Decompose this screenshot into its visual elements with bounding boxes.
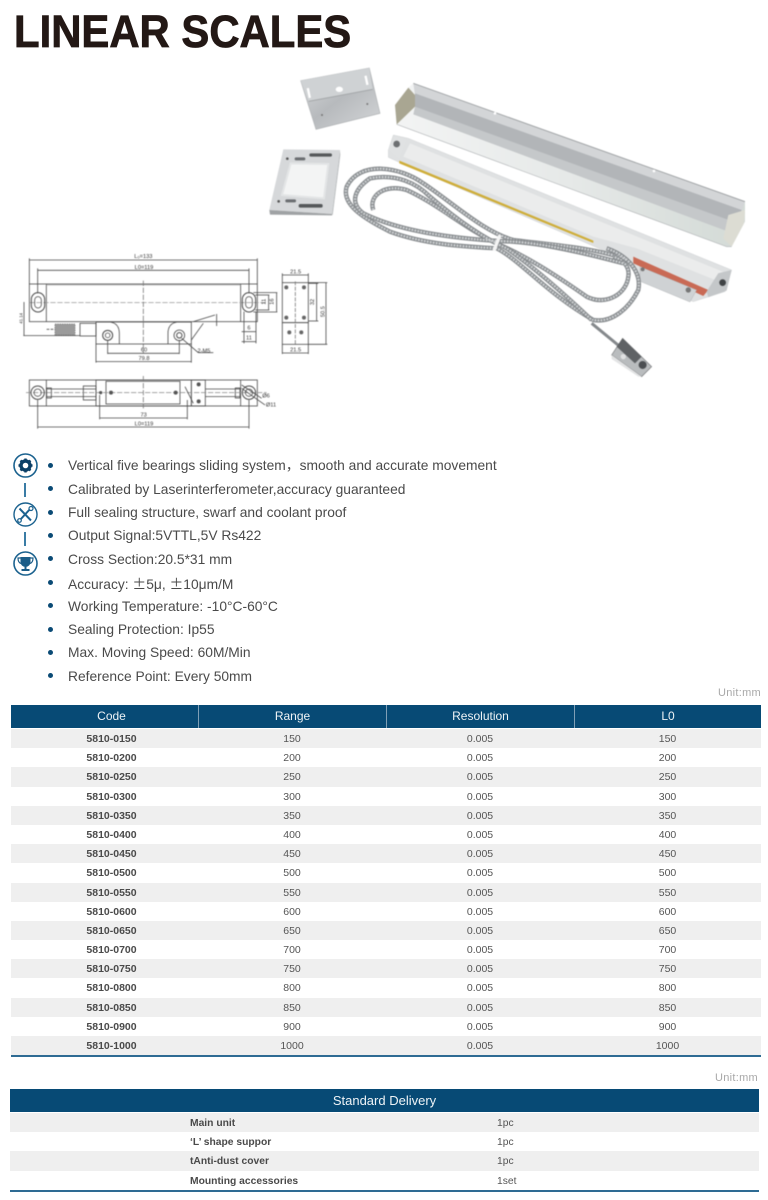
table rows: 300 xyxy=(659,791,676,803)
table rows: 0.005 xyxy=(467,752,493,764)
table rows: 0.005 xyxy=(467,1021,493,1033)
feature 3: Full sealing structure, swarf and coolant proof xyxy=(68,504,346,520)
bullet 10 xyxy=(48,673,53,678)
front view: L0=119 xyxy=(135,265,153,271)
table rows: 450 xyxy=(659,848,676,860)
table rows: 0.005 xyxy=(467,886,493,898)
table rows: 0.005 xyxy=(467,867,493,879)
connector line between lower icons xyxy=(24,532,26,546)
front view: 6 xyxy=(247,326,251,332)
armored cable xyxy=(346,169,639,347)
table rows: 0.005 xyxy=(467,1002,493,1014)
L-shaped bracket xyxy=(301,68,380,129)
bottom view xyxy=(26,376,276,429)
feature 7: Working Temperature: -10°C-60°C xyxy=(68,598,278,614)
table rows: 5810-0700 xyxy=(86,944,137,956)
table rows: 1000 xyxy=(280,1040,304,1052)
table rows xyxy=(11,729,761,1055)
table rows: 0.005 xyxy=(467,944,493,956)
table rows: 0.005 xyxy=(467,906,493,918)
table rows: 0.005 xyxy=(467,1040,493,1052)
bottom view: Ø11 xyxy=(266,403,276,409)
table rows: 900 xyxy=(283,1021,301,1033)
bullet 6 xyxy=(48,580,53,584)
bullet 2 xyxy=(48,486,53,491)
table rows: 1000 xyxy=(656,1040,679,1052)
bottom view: Ø6 xyxy=(262,393,270,399)
side view: 21.5 xyxy=(290,348,301,354)
product photo: linear scale with cover, brackets and cable xyxy=(268,67,746,378)
table rows: 5810-0600 xyxy=(86,906,137,918)
bottom view: L0=119 xyxy=(135,422,153,428)
table rows: 0.005 xyxy=(467,963,493,975)
table rows: 5810-0650 xyxy=(86,925,137,937)
bullet 1 xyxy=(48,462,53,468)
table rows: 5810-0750 xyxy=(86,963,137,975)
feature 5: Cross Section:20.5*31 mm xyxy=(68,552,232,566)
table rows: 5810-0200 xyxy=(86,752,137,764)
connector line between icons xyxy=(24,483,26,497)
table rows: 200 xyxy=(659,752,676,764)
table rows: 550 xyxy=(283,886,301,898)
table header: Range xyxy=(275,709,310,723)
bullet 5 xyxy=(48,556,53,561)
bullet 3 xyxy=(48,510,53,514)
delivery rows: 1pc xyxy=(497,1137,514,1148)
table header: L0 xyxy=(661,709,675,723)
feature 4: Output Signal:5VTTL,5V Rs422 xyxy=(68,528,261,543)
table rows: 0.005 xyxy=(467,925,493,937)
table rows: 300 xyxy=(283,791,301,803)
icon: gear badge xyxy=(13,453,38,478)
table rows: 0.005 xyxy=(467,982,493,994)
bullet 7 xyxy=(48,603,53,608)
delivery header: Standard Delivery xyxy=(333,1093,436,1108)
table rows: 150 xyxy=(283,733,301,745)
anti-dust cover xyxy=(395,83,745,247)
table rows: 400 xyxy=(283,829,301,841)
bullet 8 xyxy=(48,626,53,632)
table rows: 800 xyxy=(283,982,301,994)
side view: 32 xyxy=(310,299,316,305)
table rows: 150 xyxy=(659,733,676,745)
bottom view: 73 xyxy=(141,413,147,419)
table rows: 600 xyxy=(659,906,676,918)
table rows: 350 xyxy=(283,810,301,822)
front view: L₀=133 xyxy=(134,254,152,260)
front view: 60 xyxy=(141,348,147,354)
glass scale body xyxy=(388,135,732,302)
delivery rows: 1pc xyxy=(497,1156,514,1167)
table rows: 5810-0350 xyxy=(86,810,137,822)
table rows: 500 xyxy=(659,867,676,879)
table header xyxy=(11,705,761,728)
table rows: 700 xyxy=(283,944,301,956)
table rows: 5810-0900 xyxy=(86,1021,137,1033)
side view xyxy=(282,270,327,354)
table rows: 250 xyxy=(659,771,676,783)
bullet 9 xyxy=(48,650,53,655)
table rows: 5810-0500 xyxy=(86,867,137,879)
table rows: 650 xyxy=(659,925,676,937)
table rows: 850 xyxy=(659,1002,676,1014)
bullet 4 xyxy=(48,533,53,538)
front view: 16 xyxy=(270,299,276,305)
table rows: 750 xyxy=(659,963,676,975)
table rows: 200 xyxy=(283,752,301,764)
table rows: 900 xyxy=(659,1021,676,1033)
table rows: 250 xyxy=(283,771,301,783)
delivery rows: Mounting accessories xyxy=(190,1176,298,1187)
table rows: 5810-0850 xyxy=(86,1002,137,1014)
table rows: 600 xyxy=(283,906,301,918)
table rows: 0.005 xyxy=(467,771,493,783)
feature 9: Max. Moving Speed: 60M/Min xyxy=(68,645,251,660)
front view xyxy=(19,254,277,363)
mounting plate xyxy=(269,149,340,215)
delivery rows xyxy=(10,1113,759,1187)
feature 6: Accuracy: ±5μ, ±10μm/M xyxy=(68,572,233,592)
table header: Code xyxy=(97,709,126,723)
delivery rows: Main unit xyxy=(190,1118,235,1129)
technical dimension drawing xyxy=(19,253,328,430)
front view: 11 xyxy=(261,299,267,305)
table rows: 5810-0800 xyxy=(86,982,137,994)
delivery rows: 1set xyxy=(497,1176,516,1187)
feature 2: Calibrated by Laserinterferometer,accuracy guaranteed xyxy=(68,482,405,496)
table rows: 5810-0450 xyxy=(86,848,137,860)
table rows: 850 xyxy=(283,1002,301,1014)
table rows: 350 xyxy=(659,810,676,822)
specifications table xyxy=(11,705,761,1057)
feature 10: Reference Point: Every 50mm xyxy=(68,668,252,684)
table rows: 5810-0550 xyxy=(86,886,137,898)
unit label: delivery table: Unit:mm xyxy=(715,1072,758,1084)
table rows: 550 xyxy=(659,886,676,898)
table rows: 450 xyxy=(283,848,301,860)
table rows: 5810-0250 xyxy=(86,771,137,783)
table rows: 5810-1000 xyxy=(86,1040,137,1052)
icon: crossed tools badge xyxy=(13,502,38,527)
delivery header xyxy=(10,1089,759,1112)
front view: 41.14 xyxy=(19,312,24,324)
delivery rows: ‘L’ shape suppor xyxy=(190,1137,271,1148)
table header: Resolution xyxy=(452,709,509,723)
standard delivery table xyxy=(10,1089,759,1192)
feature 8: Sealing Protection: Ip55 xyxy=(68,622,214,636)
icon: trophy badge xyxy=(13,551,38,576)
connector xyxy=(612,338,652,377)
table rows: 400 xyxy=(659,829,676,841)
table rows: 5810-0150 xyxy=(86,733,137,745)
table rows: 0.005 xyxy=(467,848,493,860)
table rows: 5810-0300 xyxy=(86,791,137,803)
table rows: 0.005 xyxy=(467,791,493,803)
delivery rows: tAnti-dust cover xyxy=(190,1156,269,1167)
feature list xyxy=(48,458,497,684)
front view: 79.8 xyxy=(138,356,149,362)
delivery rows: 1pc xyxy=(497,1118,514,1129)
front view: 2-M5 xyxy=(198,349,210,355)
side view: 50.5 xyxy=(320,306,326,317)
front view: 11 xyxy=(246,335,252,341)
title: LINEAR SCALES xyxy=(14,6,351,57)
table rows: 650 xyxy=(283,925,301,937)
feature 1: Vertical five bearings sliding system，smooth and accurate movement xyxy=(68,458,497,472)
table rows: 0.005 xyxy=(467,829,493,841)
unit label: specs table: Unit:mm xyxy=(718,687,761,699)
table rows: 800 xyxy=(659,982,676,994)
table rows: 750 xyxy=(283,963,301,975)
table rows: 0.005 xyxy=(467,810,493,822)
side view: 21.5 xyxy=(290,270,301,276)
table rows: 5810-0400 xyxy=(86,829,137,841)
table rows: 700 xyxy=(659,944,676,956)
table rows: 500 xyxy=(283,867,301,879)
table rows: 0.005 xyxy=(467,733,493,745)
